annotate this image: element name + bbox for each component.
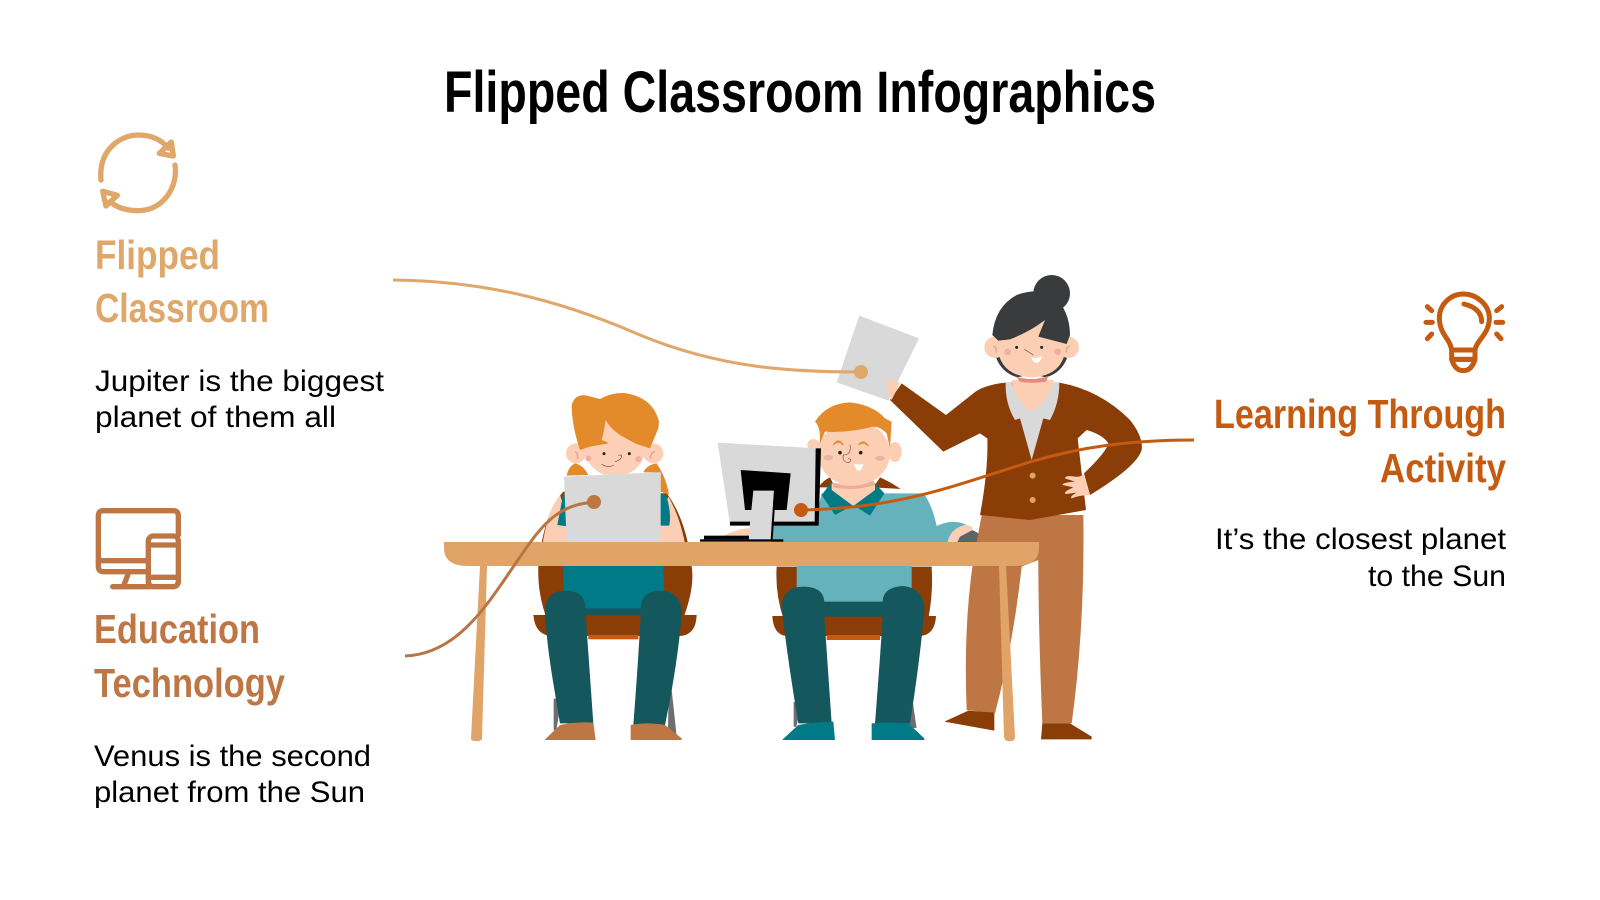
text: closest planet: It’s the closest planet bbox=[1215, 523, 1507, 556]
connector: learning through activity to monitor bbox=[794, 440, 1194, 517]
table bbox=[444, 542, 1039, 741]
icon: monitor and phone bbox=[98, 511, 178, 587]
heading: flipped classroom: Classroom bbox=[95, 285, 269, 331]
text: jupiter: Jupiter is the biggest bbox=[95, 365, 385, 398]
heading: learning through activity: Activity bbox=[1380, 445, 1506, 491]
connector: flipped classroom to paper bbox=[393, 280, 868, 379]
heading: education technology: Education bbox=[94, 606, 260, 652]
text: closest planet: to the Sun bbox=[1368, 560, 1506, 593]
icon: light bulb bbox=[1426, 294, 1503, 371]
panel: education technology bbox=[94, 511, 371, 809]
title: Flipped Classroom Infographics bbox=[444, 60, 1156, 125]
illustration: classroom scene bbox=[444, 275, 1142, 741]
connector: education technology to laptop bbox=[405, 495, 601, 656]
monitor and keyboard bbox=[700, 443, 821, 542]
heading: education technology: Technology bbox=[94, 660, 285, 706]
student: girl with chair bbox=[533, 393, 697, 740]
teacher bbox=[837, 275, 1142, 739]
text: venus: Venus is the second bbox=[94, 740, 371, 773]
text: venus: planet from the Sun bbox=[94, 776, 365, 809]
icon: cycle arrows bbox=[101, 135, 175, 211]
panel: flipped classroom bbox=[95, 135, 385, 434]
panel: learning through activity bbox=[1214, 294, 1507, 593]
heading: learning through activity: Learning Through bbox=[1214, 391, 1506, 437]
text: jupiter: planet of them all bbox=[95, 401, 336, 434]
student: boy with chair bbox=[772, 402, 986, 740]
heading: flipped classroom: Flipped bbox=[95, 232, 220, 278]
